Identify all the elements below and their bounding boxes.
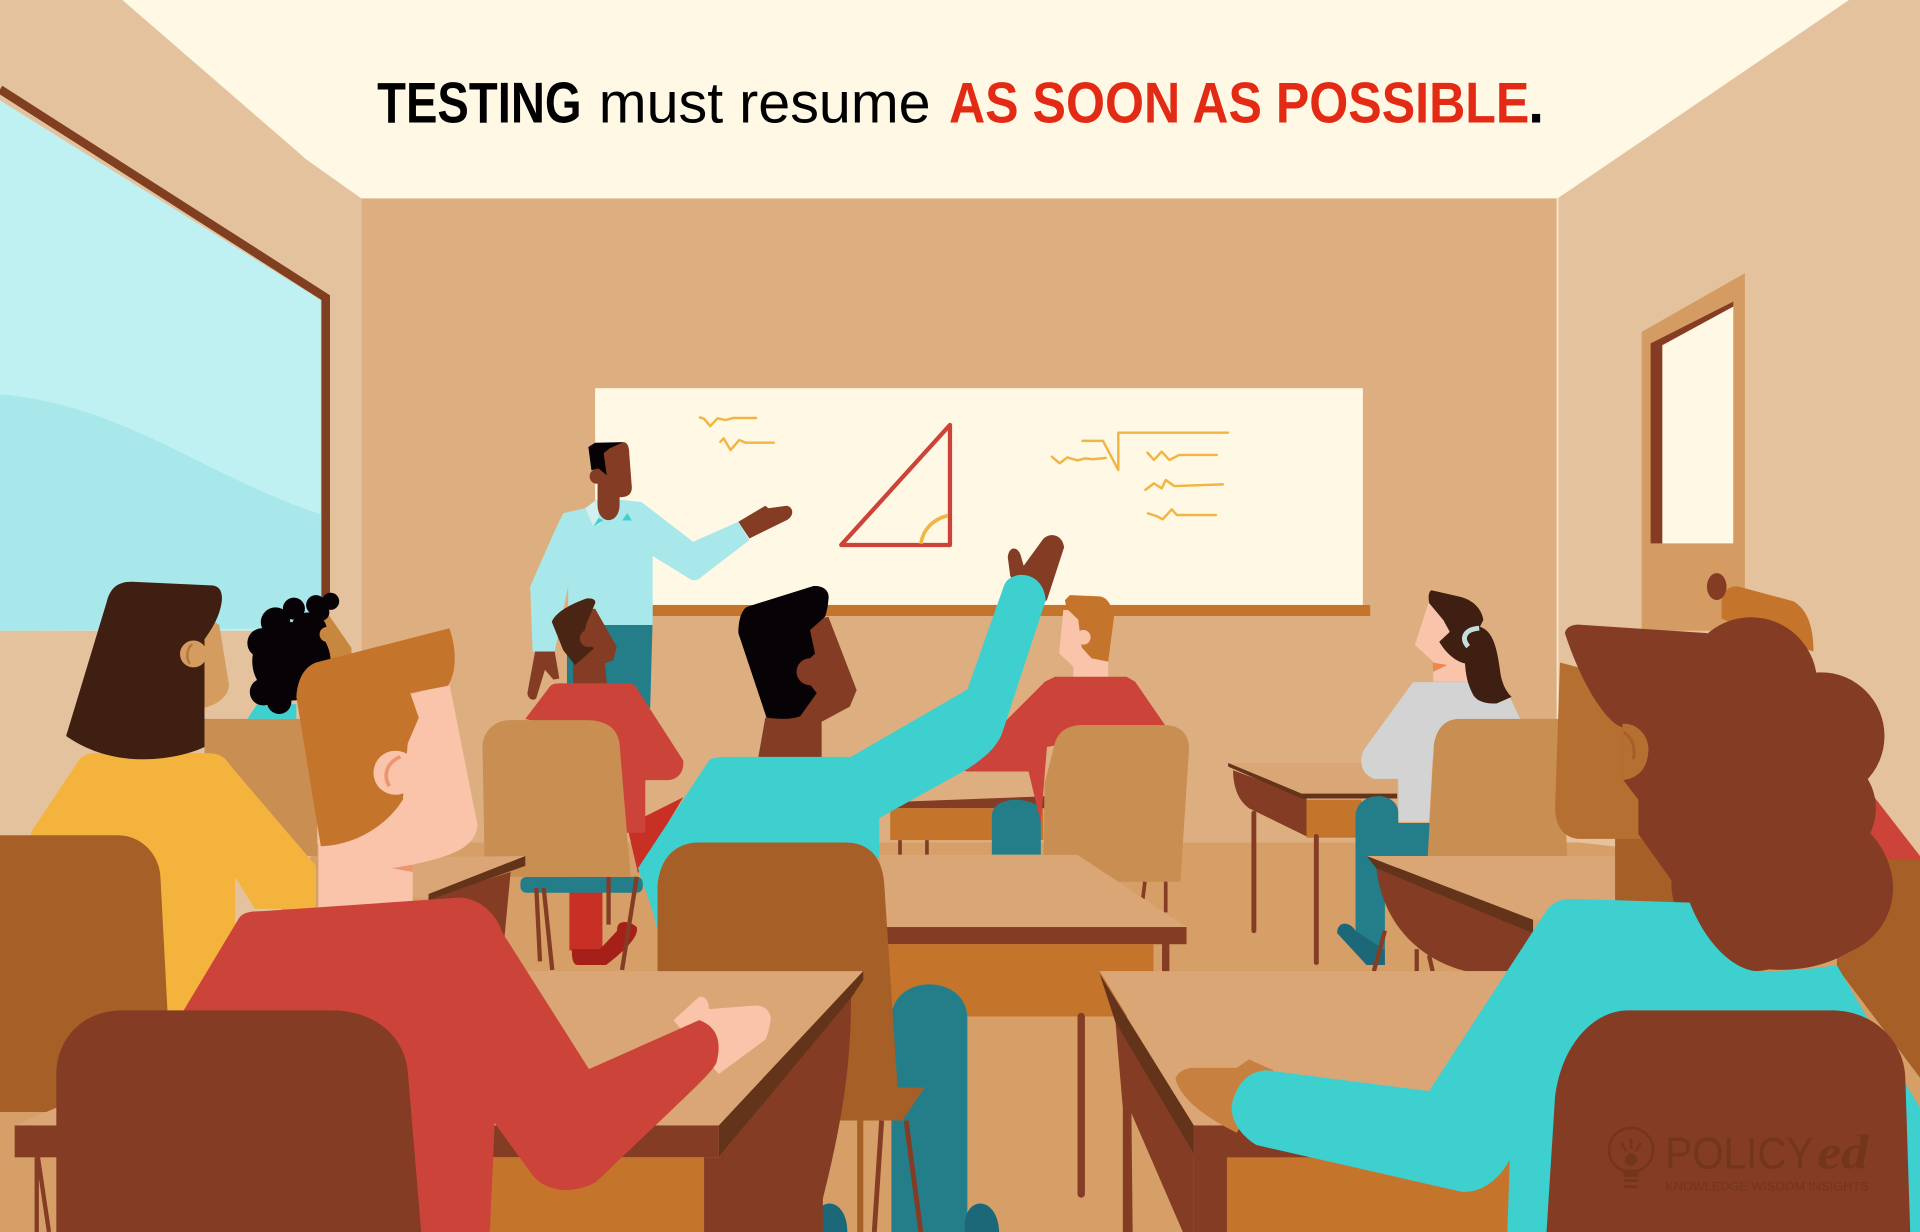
hair bbox=[738, 586, 829, 719]
red trousers bbox=[569, 797, 683, 950]
red sweater bbox=[184, 898, 719, 1232]
teacher hands bbox=[527, 506, 792, 700]
chin bbox=[392, 865, 413, 872]
chair bbox=[658, 843, 924, 1232]
face bbox=[1555, 663, 1647, 839]
door bbox=[1642, 273, 1745, 631]
student: boy in front of teacher bbox=[482, 598, 683, 970]
back right desk bbox=[1228, 763, 1397, 963]
trousers bbox=[992, 800, 1041, 855]
hair bbox=[66, 582, 222, 759]
logo wordmark: POLICY bbox=[1665, 1129, 1813, 1178]
logo wordmark suffix: ed bbox=[1817, 1124, 1870, 1179]
hair tie bbox=[1464, 628, 1479, 647]
front right desk bbox=[1100, 971, 1531, 1232]
math scribbles bbox=[700, 417, 1228, 519]
front right chair bbox=[1547, 1010, 1910, 1232]
hair bbox=[1429, 590, 1512, 704]
hair bbox=[552, 598, 595, 665]
grey sweater bbox=[1361, 682, 1521, 822]
chair bbox=[1043, 725, 1189, 882]
mouth bbox=[1433, 663, 1447, 672]
student: woman with curly hair bbox=[1555, 617, 1893, 971]
student: man in red front left bbox=[184, 628, 771, 1232]
hair bbox=[296, 628, 455, 846]
student: curly hair bbox=[247, 593, 351, 719]
neck bbox=[1615, 821, 1689, 906]
collar bbox=[247, 704, 296, 719]
student: woman in yellow bbox=[31, 582, 316, 1016]
face bbox=[321, 612, 351, 661]
chair legs bbox=[536, 877, 637, 970]
teal sweater and raised arm bbox=[638, 575, 1046, 931]
red sweater bbox=[1837, 796, 1920, 872]
chair bbox=[1837, 860, 1920, 1078]
ear bbox=[373, 751, 418, 795]
neck and face bbox=[573, 609, 617, 688]
title: . bbox=[1528, 71, 1544, 135]
ear bbox=[1076, 630, 1091, 645]
ear bbox=[580, 630, 597, 647]
teacher trousers bbox=[567, 618, 653, 708]
hand bbox=[673, 997, 771, 1074]
hand bbox=[1176, 1059, 1273, 1133]
seat bbox=[520, 877, 643, 893]
leg bbox=[891, 984, 967, 1232]
ear bbox=[320, 627, 334, 642]
student: man in red at the right bbox=[960, 595, 1189, 912]
ceiling bbox=[122, 0, 1849, 198]
chair bbox=[1428, 719, 1567, 856]
back wall bbox=[361, 198, 1558, 847]
student behind: ginger hair bbox=[1707, 573, 1813, 652]
neck bbox=[758, 718, 822, 759]
face bbox=[1415, 603, 1474, 682]
chair bbox=[482, 720, 631, 877]
curly hair bbox=[247, 593, 339, 714]
right edge student bbox=[1837, 796, 1920, 1078]
shoes bbox=[572, 922, 637, 965]
student: woman in teal sweater bbox=[1176, 899, 1920, 1232]
floor bbox=[0, 843, 1920, 1232]
door knob bbox=[1707, 573, 1727, 600]
title: AS SOON AS POSSIBLE bbox=[949, 71, 1529, 135]
centre desk bbox=[879, 855, 1187, 1194]
trousers bbox=[1356, 796, 1433, 950]
title: TESTING bbox=[377, 71, 582, 135]
logo tagline: KNOWLEDGE WISDOM INSIGHTS bbox=[1665, 1179, 1869, 1193]
ear bbox=[180, 640, 207, 667]
hair bbox=[1065, 595, 1114, 662]
teacher shirt bbox=[530, 500, 749, 652]
window bbox=[0, 89, 326, 631]
student: raised hand boy bbox=[638, 535, 1064, 1232]
neck bbox=[318, 833, 413, 912]
title: must resume bbox=[599, 71, 931, 135]
right mid desk bbox=[1367, 856, 1615, 971]
left front chair bbox=[0, 835, 168, 1112]
title bbox=[377, 71, 1544, 135]
raised hand bbox=[1008, 535, 1064, 612]
triangle diagram bbox=[841, 425, 950, 545]
back left chair bbox=[204, 719, 317, 856]
hair bbox=[1565, 617, 1893, 971]
shoe bbox=[1337, 924, 1385, 965]
face bbox=[196, 612, 229, 708]
back centre desk bbox=[890, 796, 1053, 855]
icon: light bulb bbox=[1609, 1128, 1653, 1188]
teal sweater bbox=[1232, 899, 1920, 1232]
mid left desk bbox=[392, 856, 525, 967]
whiteboard bbox=[595, 388, 1370, 616]
face bbox=[343, 683, 478, 865]
ear bbox=[1622, 724, 1649, 780]
teacher neck and head bbox=[593, 442, 632, 520]
red sweater bbox=[960, 677, 1165, 823]
red sweater bbox=[525, 683, 683, 833]
student: woman with ponytail bbox=[1337, 590, 1567, 965]
teacher hair bbox=[588, 442, 623, 475]
face bbox=[784, 617, 857, 723]
right wall bbox=[1558, 0, 1920, 931]
logo: PolicyEd watermark bbox=[1609, 1124, 1870, 1193]
neck and face bbox=[1059, 610, 1108, 677]
ear bbox=[797, 658, 823, 685]
teacher collar bbox=[585, 500, 600, 527]
shoes bbox=[814, 1204, 999, 1232]
front left desk bbox=[15, 971, 863, 1232]
teacher bbox=[527, 442, 792, 708]
yellow sweater bbox=[31, 753, 316, 1016]
front left chair bbox=[56, 1010, 421, 1232]
left wall bbox=[0, 0, 361, 931]
